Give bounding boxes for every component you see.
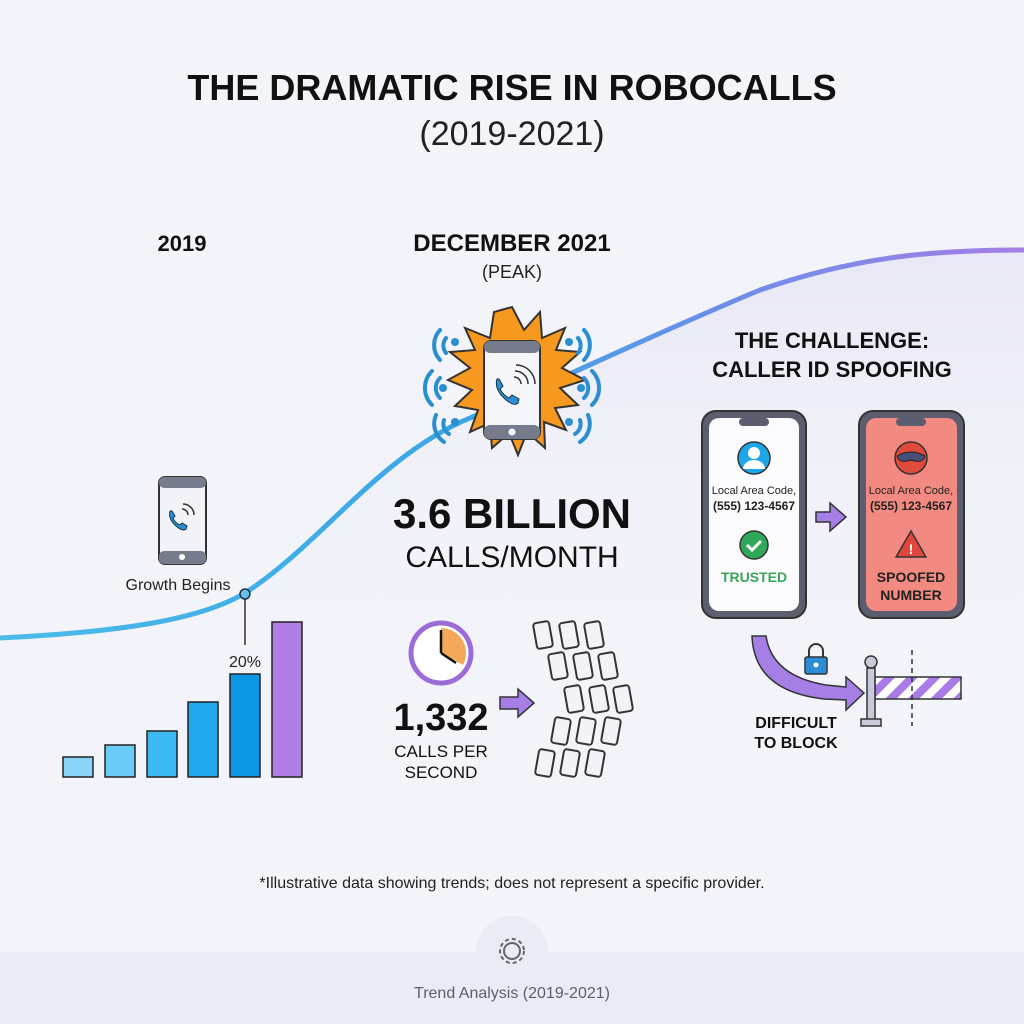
- phone: spoofed: NUMBER: [880, 587, 942, 603]
- label: growth begins: 20%: [229, 654, 261, 671]
- heading: december 2021: (PEAK): [482, 262, 542, 282]
- title: (2019-2021): [419, 115, 605, 153]
- heading: december 2021: DECEMBER 2021: [413, 230, 611, 257]
- trend line: [0, 250, 1024, 638]
- arrow: curved to barrier: [752, 636, 864, 710]
- heading: the challenge: CALLER ID SPOOFING: [712, 357, 952, 382]
- phone: trusted: (555) 123-4567: [713, 499, 795, 513]
- label: 2019: 2019: [158, 231, 206, 256]
- heading: december 2021: [413, 230, 611, 282]
- stat: 1,332 calls per second: SECOND: [405, 763, 477, 782]
- title: [187, 67, 837, 153]
- phone: trusted: TRUSTED: [721, 569, 787, 585]
- label: difficult to block: DIFFICULT: [755, 715, 837, 732]
- stat: 3.6 billion: CALLS/MONTH: [405, 541, 619, 574]
- stat: 1,332 calls per second: [393, 697, 489, 782]
- heading: the challenge: [712, 328, 952, 382]
- bar chart: [63, 622, 302, 777]
- label: difficult to block: TO BLOCK: [754, 735, 838, 752]
- arrow: purple: [500, 689, 534, 717]
- footer: [414, 916, 610, 1002]
- stat: 3.6 billion: [393, 490, 631, 574]
- heading: the challenge: THE CHALLENGE:: [735, 328, 929, 353]
- stat: 1,332 calls per second: 1,332: [393, 697, 489, 739]
- stat: 1,332 calls per second: CALLS PER: [394, 742, 488, 761]
- phone: spoofed: [859, 411, 964, 618]
- phone: trusted: Local Area Code,: [712, 485, 796, 497]
- label: difficult to block: [754, 715, 838, 752]
- phone: spoofed: Local Area Code,: [869, 485, 953, 497]
- icon: phone swarm: [533, 621, 633, 777]
- title: THE DRAMATIC RISE IN ROBOCALLS: [187, 67, 837, 108]
- icon: clock: [411, 623, 471, 683]
- icon: barrier: [861, 650, 961, 726]
- phone: trusted: [702, 411, 806, 618]
- label: growth begins: [126, 577, 261, 671]
- phone: spoofed: SPOOFED: [877, 569, 945, 585]
- footnote: *Illustrative data showing trends; does not represent a specific provider.: [259, 875, 765, 892]
- label: growth begins: Growth Begins: [126, 577, 230, 594]
- phone: spoofed: (555) 123-4567: [870, 499, 952, 513]
- arrow: trusted to spoofed: [816, 503, 846, 531]
- icon: small phone: [159, 477, 206, 564]
- stat: 3.6 billion: 3.6 BILLION: [393, 490, 631, 537]
- footer: Trend Analysis (2019-2021): [414, 985, 610, 1002]
- phone: spoofed: !: [909, 541, 913, 557]
- icon: lock: [805, 644, 827, 674]
- icon: ringing phone burst: [425, 307, 599, 455]
